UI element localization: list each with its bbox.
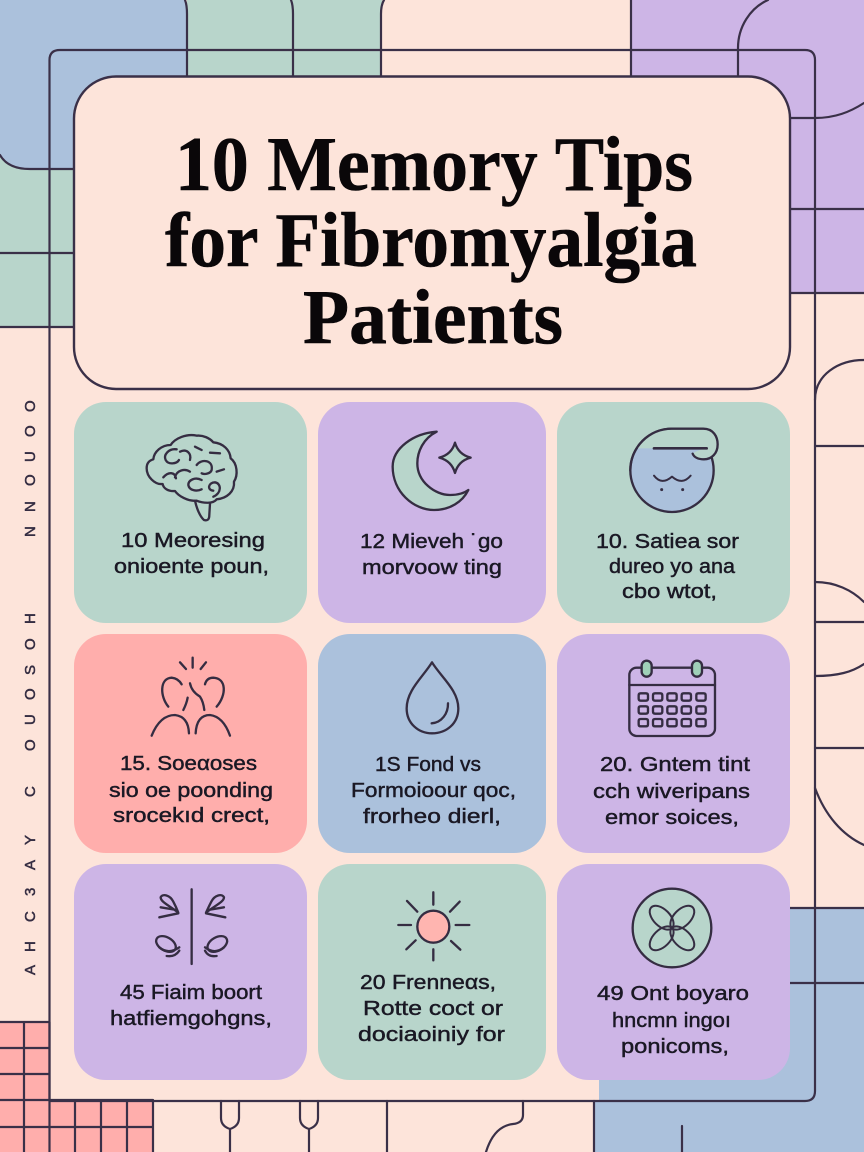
- title: 10 Memory Tips: [175, 121, 693, 207]
- title panel: [74, 76, 790, 389]
- title: Patients: [303, 274, 563, 360]
- icon: mirrored leaves: [153, 889, 230, 964]
- tip text: Formoioour qoc,: [351, 779, 516, 802]
- icon: two people with spark: [152, 658, 230, 736]
- tip text: onioente poun,: [114, 555, 269, 578]
- tip text: 20. Gntem tint: [600, 753, 750, 776]
- tip text: 15. Soeαoses: [120, 752, 257, 775]
- tip text: 49 Ont boyaro: [597, 982, 749, 1005]
- tip text: 10. Satiea sor: [596, 530, 739, 553]
- tip text: sio oe poonding: [109, 779, 273, 802]
- panel: tip card 1: [74, 402, 307, 623]
- tip text: frorheo dierl,: [363, 805, 501, 828]
- panel: tip card 2: [318, 402, 546, 623]
- panel: tip card 9: [557, 864, 790, 1080]
- tip text: cbo wtot,: [622, 580, 717, 603]
- icon: water drop: [407, 662, 458, 733]
- icon: moon and star: [393, 432, 471, 510]
- panel: tip card 7: [74, 864, 307, 1080]
- tip text: srocekıd crect,: [113, 804, 270, 827]
- icon: flower in circle: [633, 889, 711, 967]
- icon: sun: [398, 892, 469, 960]
- tip text: 10 Meoresing: [121, 529, 265, 552]
- icon: calendar: [629, 661, 715, 736]
- title: for Fibromyalgia: [165, 197, 697, 283]
- tip text: 45 Fiaim boort: [120, 981, 262, 1004]
- tip text: hncmn ingoı: [612, 1009, 731, 1032]
- tip text: dureo yo ana: [609, 555, 736, 578]
- panel: tip card 4: [74, 634, 307, 853]
- tip text: cch wiveripans: [593, 780, 750, 803]
- tip text: dociaoiniy for: [358, 1023, 505, 1046]
- side lettering: [22, 400, 39, 975]
- side lettering: OUOSOH: [22, 613, 39, 751]
- panel: tip card 8: [318, 864, 546, 1080]
- tip text: morvoow ting: [362, 556, 502, 579]
- panel: tip card 6: [557, 634, 790, 853]
- panel: tip card 5: [318, 634, 546, 853]
- tip text: emor soices,: [605, 806, 739, 829]
- icon: brain: [147, 435, 237, 520]
- tip text: 1S Fond vs: [375, 753, 481, 776]
- side lettering: NNOUOO: [22, 400, 39, 537]
- tip text: 12 Mieveh ˙go: [360, 530, 503, 553]
- tip text: 20 Frenneαs,: [360, 971, 496, 994]
- tip text: ponicoms,: [621, 1035, 729, 1058]
- tip text: Rotte coct or: [363, 997, 503, 1020]
- panel: tip card 3: [557, 402, 790, 623]
- icon: face with cap: [630, 429, 718, 512]
- side lettering: CYA3CHA: [22, 786, 39, 975]
- tip text: hatfiemgohgns,: [110, 1007, 272, 1030]
